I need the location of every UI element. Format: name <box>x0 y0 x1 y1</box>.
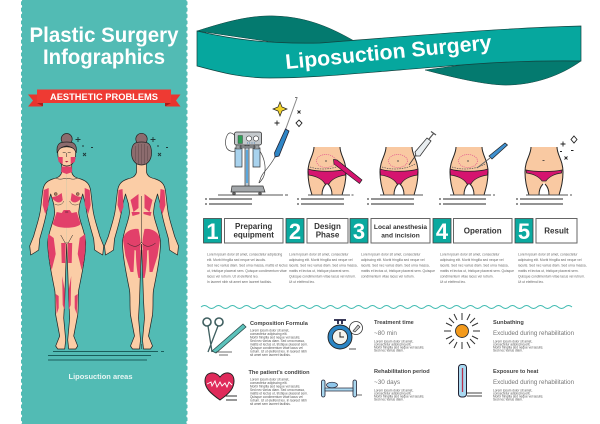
text block: patient's condition: Sed nec varius diam. Sed urna massa, <box>250 388 305 392</box>
figure: front body with liposuction areas <box>30 134 104 349</box>
text block: step 5: Lorem ipsum dolor sit amet, consectetur <box>518 252 578 256</box>
icon: heart with pulse <box>205 373 237 400</box>
pink zones: face and neck <box>58 157 76 174</box>
text block: step 5 <box>518 252 587 284</box>
text block: sunbathing: Sed nec varius diam. <box>493 348 523 352</box>
illustration: step 1 liposuction machine <box>205 98 302 204</box>
text block: step 1: Sed nec varius diam. Sed urna massa, mattis et lectus <box>207 264 288 268</box>
text block: composition formula: sit amet sem laoreet facilisis. <box>250 353 291 357</box>
text block: exposure to heat: consectetur adipiscing elit. <box>493 392 530 396</box>
text block: step 2: Ut ut eleifend leo. <box>289 280 315 284</box>
text block: rehabilitation period: consectetur adipiscing elit. <box>374 392 411 396</box>
text block: sunbathing: Lorem ipsum dolor sit amet, <box>493 340 532 344</box>
step 4 header <box>433 218 512 244</box>
text block: treatment time: Morbi fringilla sed neque vel iaculis. <box>374 346 424 350</box>
text block: step 1: elit. Morbi fringilla sed neque vel iaculis. <box>207 258 266 262</box>
text block: step 4: iaculis. Sed nec varius diam. Sed urna massa, <box>440 264 509 268</box>
text block: treatment time: Treatment time <box>374 320 414 326</box>
text block: rehabilitation period: Lorem ipsum dolor sit amet, <box>374 388 413 392</box>
text block: sunbathing: Morbi fringilla sed neque vel iaculis. <box>493 346 543 350</box>
icon: scissors and scalpel <box>203 318 246 355</box>
text block: patient's condition: consectetur adipiscing elit. <box>250 381 287 385</box>
text block: composition formula: consectetur adipiscing elit. <box>250 332 287 336</box>
machine pole and base <box>245 145 249 187</box>
text block: patient's condition: Quisque condimentum vitae lacus vel <box>250 395 303 399</box>
text block: composition formula: Lorem ipsum dolor sit amet, <box>250 328 289 332</box>
text block: step 2 <box>289 252 358 284</box>
text block: patient's condition: Lorem ipsum dolor sit amet, <box>250 378 289 382</box>
step 2 header: Phase <box>316 230 340 240</box>
text block: treatment time: consectetur adipiscing elit. <box>374 342 411 346</box>
floor shadow lines under bodies <box>48 352 164 360</box>
title line two: Infographics <box>43 45 165 69</box>
text block: composition formula: Sed nec varius diam. Sed urna massa, <box>250 339 305 343</box>
banner: liposuction surgery ribbon <box>197 16 581 85</box>
illustration: step 5 result <box>516 136 577 204</box>
text block: rehabilitation period: Morbi fringilla sed neque vel iaculis. <box>374 394 424 398</box>
step 3 header <box>350 218 430 244</box>
text block: treatment time <box>374 320 424 352</box>
step 3 header: Local anesthesia <box>374 224 427 231</box>
text block: step 5: mattis et lectus ut, tristique placerat sem. <box>518 269 579 273</box>
text block: rehabilitation period: ~30 days <box>374 379 400 386</box>
step 2 header <box>286 218 348 244</box>
step 5 header: Result <box>544 226 569 236</box>
text block: exposure to heat: Lorem ipsum dolor sit amet, <box>493 388 532 392</box>
text block: step 5: Quisque condimentum vitae lacus vel rutrum. <box>518 274 585 278</box>
text block: rehabilitation period <box>374 369 430 402</box>
text block: treatment time: Lorem ipsum dolor sit amet, <box>374 340 413 344</box>
pink zones: abdomen and thighs <box>53 210 81 228</box>
step 3 header: 3 <box>353 219 365 244</box>
title: Plastic Surgery <box>30 23 179 47</box>
step 2 header: Design <box>314 222 341 231</box>
step 1 header <box>204 218 283 244</box>
text block: patient's condition: sit amet sem laoreet facilisis. <box>250 402 291 406</box>
cannula handpiece <box>285 98 297 131</box>
ribbon: aesthetic problems: AESTHETIC PROBLEMS <box>50 92 158 102</box>
text block: sunbathing: consectetur adipiscing elit. <box>493 342 530 346</box>
machine body <box>234 132 262 145</box>
icon: hospital bed <box>322 380 362 397</box>
step 2 header: 2 <box>289 219 301 244</box>
text block: step 3: mattis et lectus ut, tristique placerat sem. Quisque <box>361 269 435 273</box>
machine bottles <box>235 148 260 167</box>
illustration: step 4 operation cannula <box>439 143 508 204</box>
ribbon: aesthetic problems <box>28 90 180 106</box>
text block: step 4: mattis et lectus ut, tristique placerat sem. Quisque <box>440 269 514 273</box>
text block: sunbathing: Excluded during rehabilitation <box>493 330 574 337</box>
text block: step 4: adipiscing elit. Morbi fringilla sed neque vel <box>440 258 504 262</box>
text block: patient's condition: mattis et lectus ut, tristique placerat sem. <box>250 392 308 396</box>
text block: step 4 <box>440 252 514 284</box>
wave divider <box>201 306 572 308</box>
text block: step 2: adipiscing elit. Morbi fringilla sed neque vel <box>289 258 353 262</box>
text block: patient's condition: The patient's condition <box>248 370 310 376</box>
text block: rehabilitation period: Sed nec varius diam. <box>374 398 404 402</box>
text block: composition formula: rutrum. Ut ut eleifend leo. In laoreet nibh <box>250 350 307 354</box>
text block: step 3: iaculis. Sed nec varius diam. Sed urna massa, <box>361 264 430 268</box>
text block: step 1: Lorem ipsum dolor sit amet, consectetur adipiscing <box>207 252 282 256</box>
text block: step 2: Quisque condimentum vitae lacus vel rutrum. <box>289 274 356 278</box>
text block: composition formula: Quisque condimentum vitae lacus vel <box>250 346 303 350</box>
text block: composition formula: Composition Formula <box>250 321 309 327</box>
text block: step 1: ut, tristique placerat sem. Quisque condimentum vitae <box>207 269 287 273</box>
text block: step 3 <box>361 252 435 278</box>
icon: stopwatch <box>328 320 362 349</box>
text block: step 4: Lorem ipsum dolor sit amet, consectetur <box>440 252 500 256</box>
banner heading: Liposuction Surgery <box>284 31 493 74</box>
text block: step 3: condimentum vitae lacus vel rutrum. <box>361 274 415 278</box>
machine tubing <box>225 133 275 183</box>
text block: composition formula: Morbi fringilla sed neque vel iaculis. <box>250 336 300 340</box>
sparkle icons <box>273 102 287 116</box>
text block: step 1 <box>207 252 288 284</box>
caption: liposuction areas: Liposuction areas <box>68 374 133 381</box>
syringe <box>409 155 416 165</box>
text block: step 2: mattis et lectus ut, tristique placerat sem. <box>289 269 350 273</box>
text block: composition formula <box>250 321 309 357</box>
text block: step 5: iaculis. Sed nec varius diam. Sed urna massa, <box>518 264 587 268</box>
icon: thermometer <box>458 364 482 397</box>
text block: exposure to heat: Sed nec varius diam. <box>493 398 523 402</box>
sparkles <box>560 136 577 160</box>
pink zones: arms and chest <box>43 188 91 214</box>
step 5 header: 5 <box>518 219 530 244</box>
text block: step 2: iaculis. Sed nec varius diam. Sed urna massa, <box>289 264 358 268</box>
text block: sunbathing: Sunbathing <box>493 320 524 326</box>
text block: rehabilitation period: Rehabilitation period <box>374 369 430 375</box>
step 1 header: 1 <box>206 219 219 244</box>
text block: exposure to heat: Exposure to heat <box>493 369 539 375</box>
text block: step 3: adipiscing elit. Morbi fringilla sed neque vel <box>361 258 425 262</box>
text block: exposure to heat <box>493 369 574 402</box>
text block: composition formula: mattis et lectus ut, tristique placerat sem. <box>250 342 308 346</box>
marking pen <box>334 160 362 184</box>
text block: exposure to heat: Excluded during rehabilitation <box>493 379 574 386</box>
icon: sun <box>444 313 480 349</box>
figure: back body with liposuction areas <box>104 133 178 349</box>
text block: step 4: Ut ut eleifend leo. <box>440 280 466 284</box>
illustration: step 2 design phase abdomen <box>297 147 362 204</box>
text block: step 3: Lorem ipsum dolor sit amet, consectetur <box>361 252 421 256</box>
cannula <box>477 158 490 168</box>
illustration: step 3 anesthesia syringe <box>367 132 436 204</box>
step 4 header: 4 <box>436 219 449 244</box>
text block: patient's condition: Morbi fringilla sed neque vel iaculis. <box>250 384 300 388</box>
text block: step 4: condimentum vitae lacus vel rutrum. <box>440 274 494 278</box>
step 4 header: Operation <box>464 226 502 236</box>
text block: treatment time: ~80 min <box>374 330 397 337</box>
text block: patient's condition <box>248 370 310 406</box>
step 3 header: and incision <box>381 232 420 240</box>
text block: step 1: lacus vel rutrum. Ut ut eleifend leo. <box>207 274 259 278</box>
step 1 header: Preparing <box>235 222 272 231</box>
text block: step 2: Lorem ipsum dolor sit amet, consectetur <box>289 252 349 256</box>
panel: left teal sidebar <box>20 0 188 424</box>
step 1 header: equipment <box>233 230 274 240</box>
text block: step 5: adipiscing elit. Morbi fringilla sed neque vel <box>518 258 582 262</box>
sparkles near heads <box>76 137 168 156</box>
text block: patient's condition: rutrum. Ut ut eleifend leo. In laoreet nibh <box>250 398 307 402</box>
text block: sunbathing <box>493 320 574 352</box>
text block: step 1: In laoreet nibh sit amet sem laoreet facilisis. <box>207 280 272 284</box>
text block: exposure to heat: Morbi fringilla sed neque vel iaculis. <box>493 394 543 398</box>
step 5 header <box>515 218 577 244</box>
text block: treatment time: Sed nec varius diam. <box>374 348 404 352</box>
text block: step 5: Ut ut eleifend leo. <box>518 280 544 284</box>
